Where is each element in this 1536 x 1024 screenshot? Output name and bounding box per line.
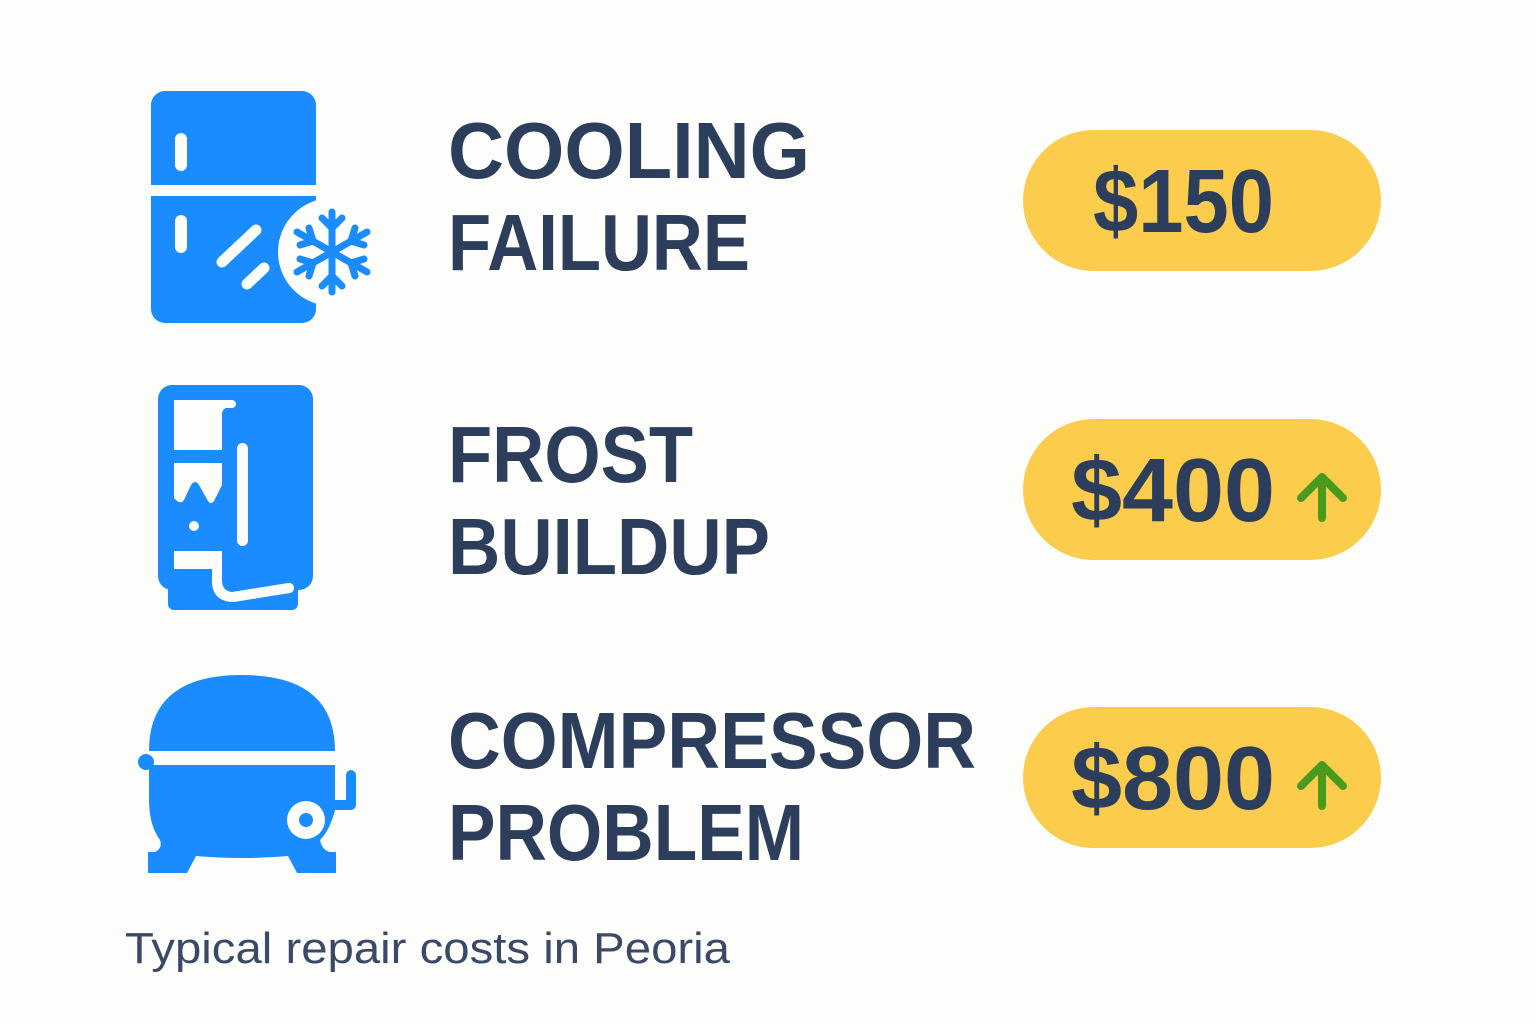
icon: compressor xyxy=(138,675,356,873)
price pill: $150 xyxy=(1023,130,1381,271)
heading: cooling failure xyxy=(448,106,810,287)
heading: cooling failure: COOLING xyxy=(448,106,810,195)
heading: compressor problem: COMPRESSOR xyxy=(448,696,976,785)
icon: frosted fridge xyxy=(158,385,313,610)
caption: Typical repair costs in Peoria xyxy=(125,924,731,973)
heading: frost buildup: FROST xyxy=(448,410,693,499)
heading: frost buildup xyxy=(448,410,770,591)
price pill: $400 with up arrow xyxy=(1023,419,1381,560)
price pill: $800 with up arrow xyxy=(1023,707,1381,848)
heading: compressor problem xyxy=(448,696,976,877)
price pill: $400 with up arrow: $400 xyxy=(1071,441,1275,541)
heading: compressor problem: PROBLEM xyxy=(448,788,804,877)
price pill: $150: $150 xyxy=(1093,152,1274,252)
heading: cooling failure: FAILURE xyxy=(448,198,750,287)
icon: fridge with snowflake xyxy=(151,91,386,323)
heading: frost buildup: BUILDUP xyxy=(448,502,770,591)
price pill: $800 with up arrow: $800 xyxy=(1071,729,1275,829)
